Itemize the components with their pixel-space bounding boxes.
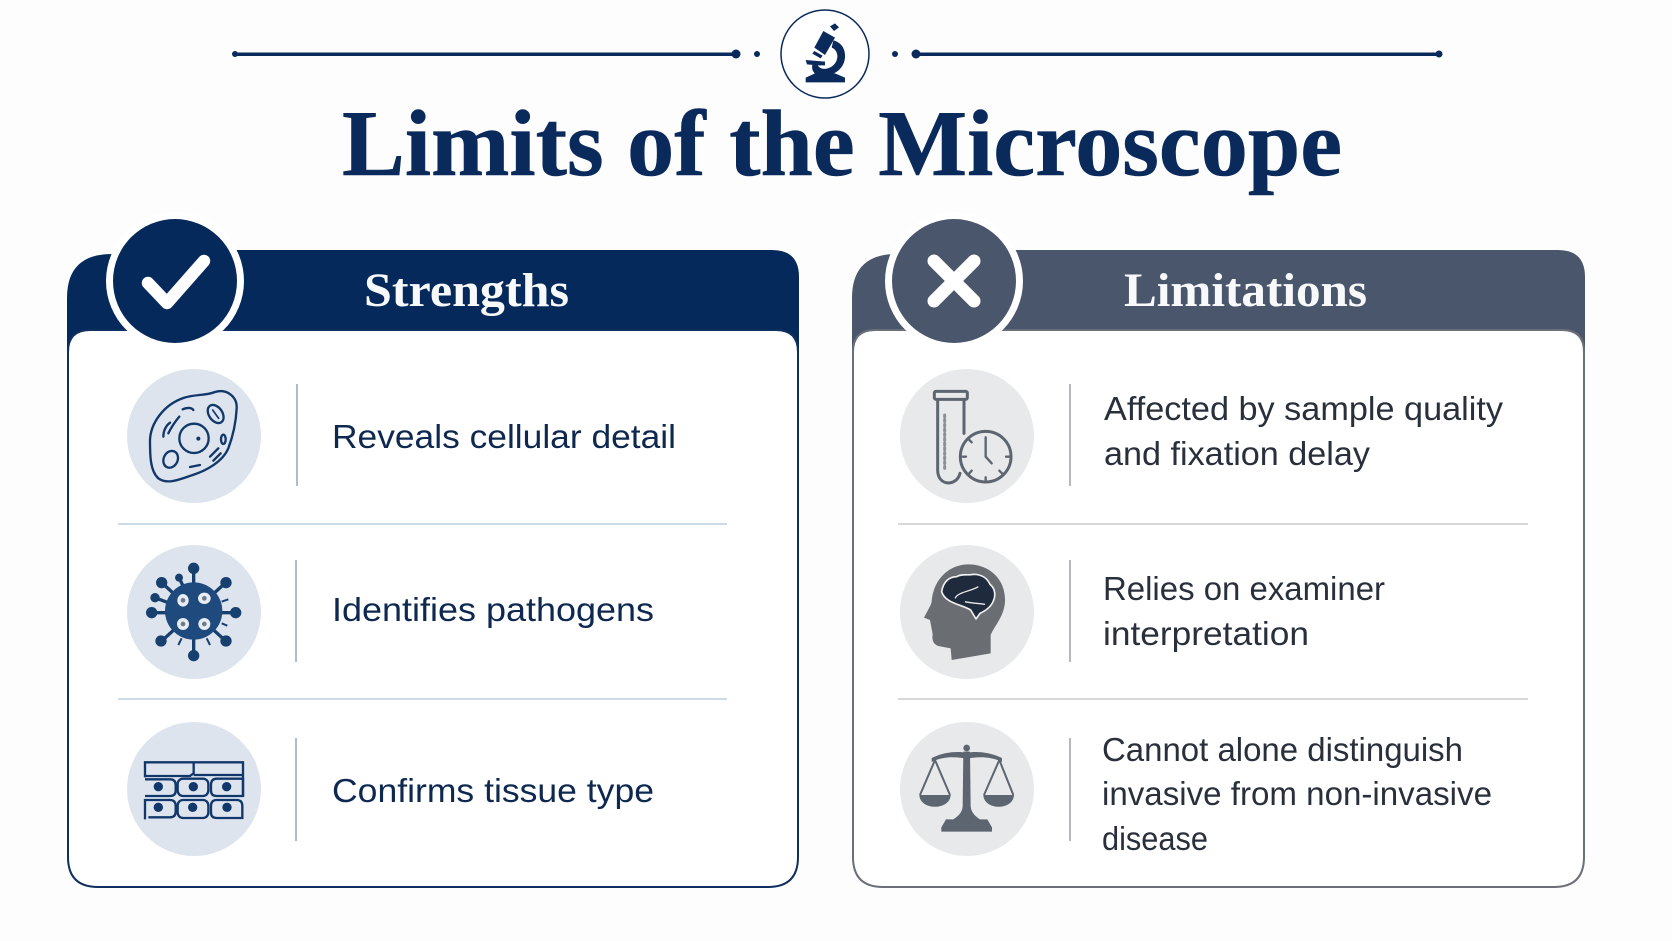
divider <box>295 738 297 841</box>
row: confirms tissue type <box>127 722 654 856</box>
header ornament <box>232 10 1442 98</box>
heading: strengths: Strengths <box>364 264 569 317</box>
badge: check mark <box>106 212 244 350</box>
text <box>1102 731 1492 857</box>
divider <box>1069 560 1071 662</box>
icon: cell <box>150 391 237 481</box>
badge: cross <box>885 212 1023 350</box>
divider <box>1069 738 1071 841</box>
text: Relies on examiner <box>1103 570 1385 607</box>
row: sample quality <box>900 369 1504 503</box>
text: Identifies pathogens <box>332 591 654 628</box>
row: examiner interpretation <box>900 545 1385 679</box>
text: Cannot alone distinguish <box>1102 731 1463 768</box>
icon: balance scale <box>919 745 1014 832</box>
text: Reveals cellular detail <box>332 418 676 455</box>
heading: limitations: Limitations <box>1124 264 1367 317</box>
row: reveals cellular detail <box>127 369 676 503</box>
icon: tissue <box>145 762 243 819</box>
row: identifies pathogens <box>127 545 654 679</box>
text: Affected by sample quality <box>1104 390 1504 427</box>
icon: test tube and clock <box>934 391 1011 483</box>
text <box>1103 570 1385 652</box>
divider <box>295 560 297 662</box>
text: and fixation delay <box>1104 435 1371 472</box>
icon: microscope <box>806 23 845 82</box>
row: invasive disease <box>900 722 1492 857</box>
panel: limitations <box>852 212 1585 887</box>
title: Limits of the Microscope <box>342 92 1342 196</box>
divider <box>1069 384 1071 486</box>
panel: strengths <box>67 212 799 887</box>
text: invasive from non-invasive <box>1102 775 1492 812</box>
text: interpretation <box>1103 615 1309 652</box>
icon: head with brain <box>924 564 1005 660</box>
text <box>1104 390 1504 472</box>
text: disease <box>1102 820 1208 857</box>
divider <box>296 384 298 486</box>
text: Confirms tissue type <box>332 772 654 809</box>
icon: virus <box>148 564 240 660</box>
